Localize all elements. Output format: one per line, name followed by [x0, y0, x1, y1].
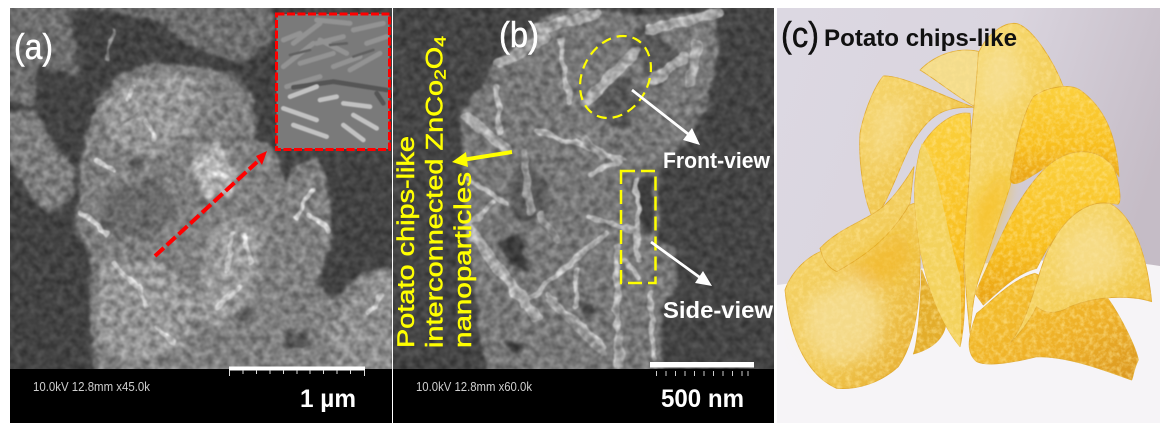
arrow: front-view — [632, 90, 700, 145]
scale bar 500 nm — [650, 362, 754, 376]
arrow: side-view — [651, 242, 712, 286]
scale bar 1 micron — [229, 366, 365, 376]
panel b: SEM micrograph at 500 nm scale — [385, 0, 785, 423]
caption line 2: 4 — [432, 36, 450, 47]
arrow: yellow pointer — [452, 152, 512, 167]
scale label a: 1 µm — [300, 385, 356, 413]
label: side-view: Side-view — [663, 297, 773, 323]
label (c): (c) — [781, 14, 819, 55]
label (b): (b) — [499, 14, 539, 55]
caption line 2: O — [422, 47, 448, 69]
caption line 2: 2 — [432, 69, 450, 80]
caption line 2: interconnected ZnCo — [422, 125, 448, 348]
info bar a — [10, 366, 392, 423]
inset dashed frame — [276, 14, 390, 150]
acquisition data b: 10.0kV 12.8mm x60.0k — [416, 379, 532, 394]
caption line 1: Potato chips-like — [393, 136, 420, 348]
label: front-view: Front-view — [663, 148, 771, 173]
info bar b — [393, 362, 774, 423]
photo background — [777, 8, 1160, 423]
inset: magnified view — [276, 14, 390, 149]
SEM image a — [0, 0, 400, 380]
label (a): (a) — [14, 26, 53, 67]
chip shading highlights — [803, 37, 1130, 367]
SEM image b — [385, 0, 785, 380]
potato chips — [785, 23, 1152, 389]
callout: side-view rectangle — [621, 171, 656, 283]
panel c: potato chips photo — [777, 8, 1160, 423]
caption line 3: nanoparticles — [450, 172, 477, 348]
arrow: red dashed pointer to inset — [155, 151, 267, 256]
rotated yellow caption — [393, 36, 477, 348]
acquisition data a: 10.0kV 12.8mm x45.0k — [33, 379, 150, 394]
callout: front-view ellipse — [566, 24, 665, 130]
scale label b: 500 nm — [661, 385, 744, 413]
panel a: SEM micrograph at 1 micron scale — [0, 0, 400, 423]
heading: potato chips-like: Potato chips-like — [824, 25, 1017, 52]
